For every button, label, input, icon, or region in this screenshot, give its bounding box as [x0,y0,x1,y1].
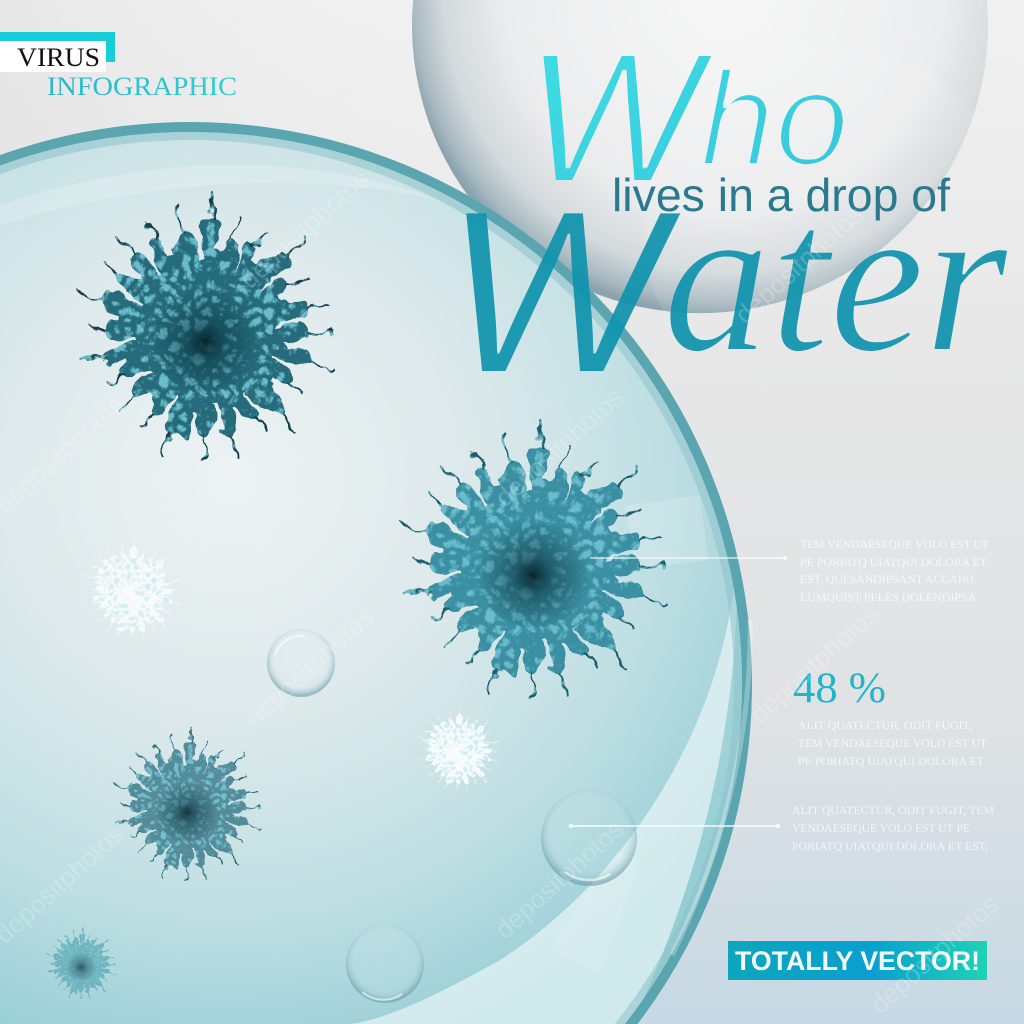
virus 2 [400,420,668,700]
title [445,15,1008,422]
text block middle: TEM VENDAESEQUE VOLO EST UT [798,736,988,750]
text block middle [798,718,988,768]
top glass sphere [412,0,988,314]
text block top: TEM VENDAESEQUE VOLO EST UT [800,537,990,551]
title word who: ho [700,45,849,194]
text block bottom: PORIATQ UIATQUI DOLORA ET EST, [792,839,988,853]
callout line top [590,556,787,560]
statistic 48 percent: 48 % [793,665,886,712]
infographic canvas: depositphotos [489,382,629,512]
text block bottom: VENDAESEQUE VOLO EST UT PE [792,821,970,835]
text block middle: PE PORIATQ UIATQUI DOLORA ET [798,754,985,768]
title word water: W [445,163,683,422]
large water drop [0,122,752,1024]
infographic canvas: depositphotos [234,164,374,294]
rim highlight crescent [350,588,736,1024]
infographic canvas: depositphotos [744,599,884,729]
text block bottom: ALIT QUATECTUR, ODIT FUGIT, TEM [792,803,994,817]
text block top: PE PORIATQ UIATQUI DOLORA ET [800,555,988,569]
text block top: EST, QUI SANDIPSANT ACCABO. [800,572,977,586]
title line lives in a drop of: lives in a drop of [612,169,950,221]
logo bracket [0,32,115,62]
logo white tab [0,41,106,72]
water bubble small [267,629,335,697]
title word water: ater [663,160,1008,397]
infographic canvas: depositphotos [864,889,1004,1019]
virus 4 [46,927,116,999]
white virus right [417,706,499,792]
callout line bottom [569,824,780,828]
water bubble bottom [346,925,424,1003]
virus 1 [76,192,336,462]
logo word infographic: INFOGRAPHIC [47,72,237,101]
infographic canvas: depositphotos [729,199,869,329]
badge: totally vector: TOTALLY VECTOR! [735,946,980,976]
text block bottom [792,803,994,853]
title word who: W [525,15,716,222]
text block middle: ALIT QUATECTUR, ODIT FUGIT, [798,718,972,732]
logo word virus: VIRUS [17,43,100,72]
text block top: LUMQUIST PELES DOLENDIPSA [800,590,976,604]
logo: virus infographic [0,32,237,101]
infographic canvas: depositphotos [489,814,629,944]
white virus left [82,536,183,641]
infographic canvas: depositphotos [239,602,379,732]
text block top [800,537,990,604]
water bubble right [541,790,637,886]
virus 3 [113,727,262,882]
